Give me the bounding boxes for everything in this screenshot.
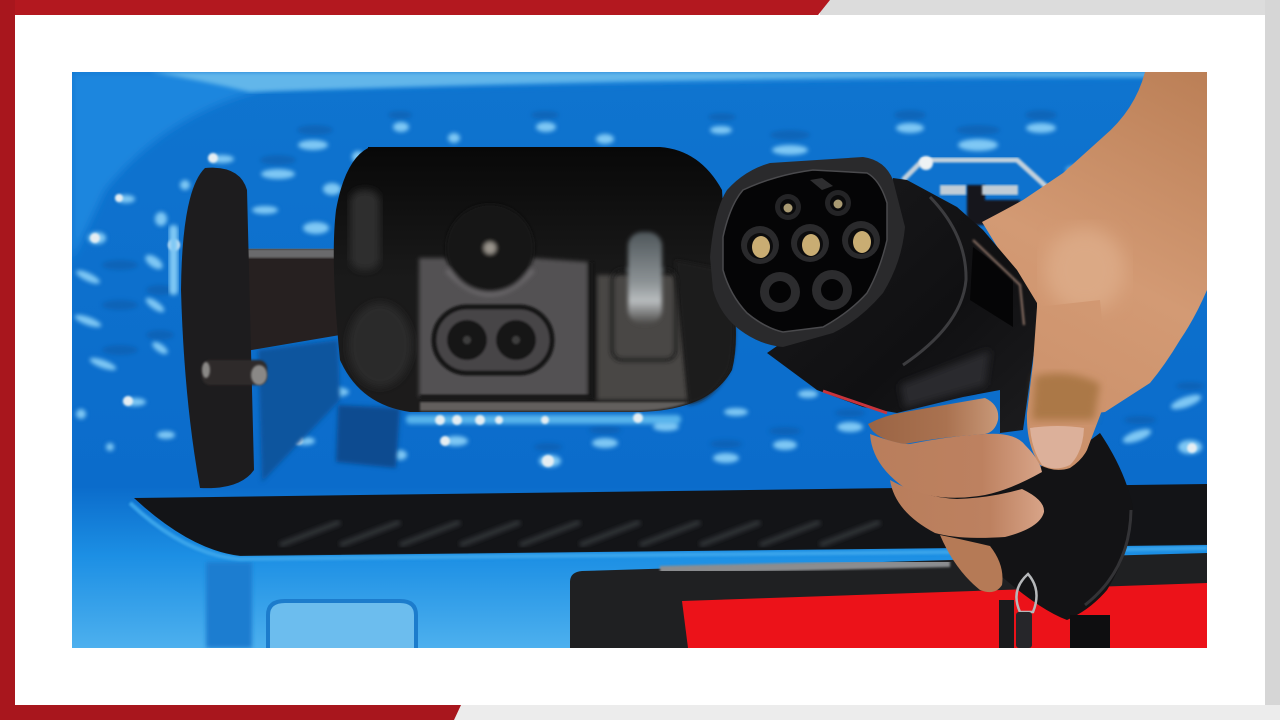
handle cuff edge	[1085, 510, 1131, 605]
emblem behind connector	[903, 160, 1050, 190]
emblem light bars	[940, 185, 1018, 195]
flap hinge arm	[248, 249, 338, 350]
hand	[982, 72, 1207, 420]
DC right hole	[496, 320, 536, 360]
upper socket well	[446, 238, 535, 294]
emblem dark bars	[967, 185, 1020, 225]
upper socket	[446, 238, 535, 297]
panel upper left bevel	[72, 72, 248, 252]
frame: light bottom bar	[450, 705, 1280, 720]
photo: EV charging port and connector	[72, 72, 1207, 648]
pin PP	[812, 270, 852, 310]
frame: red bottom bar	[0, 705, 461, 720]
strap cord	[999, 600, 1014, 648]
face inner recess	[723, 170, 887, 332]
connector red stripe	[823, 391, 887, 413]
grey socket block	[419, 258, 588, 397]
DC left hole	[447, 320, 487, 360]
grille slot light edge	[130, 503, 1207, 559]
barrel collar line	[903, 197, 966, 365]
emblem highlight dot	[919, 156, 933, 170]
right grey block	[597, 275, 690, 400]
panel top light edge	[72, 72, 1150, 92]
latch frame	[612, 270, 676, 360]
grille hatching	[280, 522, 880, 545]
pin L2	[825, 190, 851, 216]
flap hinge top edge	[245, 249, 337, 258]
latch highlight	[628, 232, 662, 324]
strap fob	[1016, 612, 1032, 648]
tail light trim	[660, 563, 950, 570]
latch	[612, 232, 676, 360]
frame: grey right bar	[1265, 0, 1280, 720]
pin CP	[760, 272, 800, 312]
little finger	[940, 535, 1002, 592]
door shadow on panel	[258, 340, 340, 482]
connector barrel	[767, 178, 1037, 433]
tail light red lens	[682, 583, 1207, 648]
connector grip panel	[970, 247, 1013, 327]
panel shadow strip	[206, 562, 252, 648]
DC left hole centre	[463, 336, 471, 344]
upper socket arc	[447, 270, 533, 294]
grille slot	[134, 484, 1207, 556]
block divider	[420, 262, 592, 397]
flap plate	[181, 168, 254, 488]
barrel skin reflection	[973, 240, 1024, 325]
face outer rim	[710, 157, 905, 347]
upper socket pin	[484, 242, 496, 254]
frame: red top bar	[0, 0, 830, 15]
charge port recess	[334, 147, 736, 412]
thumbnail	[1030, 426, 1084, 468]
connector cable	[1070, 615, 1110, 648]
recess shadow block	[336, 405, 400, 468]
palm and wrist	[982, 72, 1207, 420]
frame: red left bar	[0, 0, 15, 720]
DC socket frame	[434, 307, 552, 373]
flap hinge bolt	[202, 360, 267, 385]
palm highlight	[1045, 228, 1125, 312]
middle finger	[870, 434, 1042, 498]
connector handle lower	[990, 433, 1133, 620]
panel streak by flap	[169, 225, 178, 295]
fingers and thumb	[868, 300, 1107, 592]
perforation bright cores	[90, 153, 1197, 467]
right dark side	[678, 302, 738, 407]
lower grey strip	[420, 402, 690, 411]
pin PE	[791, 224, 829, 262]
thumb knuckle tan patch	[1032, 373, 1100, 420]
recess left upper lump	[350, 190, 380, 270]
charge flap	[181, 168, 340, 488]
pin N	[741, 226, 779, 264]
perforation shadows	[102, 110, 1204, 451]
connector face	[710, 157, 905, 347]
tail light housing	[570, 553, 1207, 648]
car body panel	[72, 72, 1207, 648]
key notch	[810, 178, 833, 190]
index finger	[868, 398, 998, 444]
thumb	[1027, 300, 1107, 470]
lower DC socket	[434, 307, 552, 373]
pin L3	[842, 221, 880, 259]
pin L1	[775, 194, 801, 220]
barrel gloss	[900, 350, 990, 408]
perforation highlights	[73, 122, 1203, 467]
lower recess outline	[268, 601, 416, 648]
flap bolt highlights	[202, 362, 267, 385]
DC right hole centre	[512, 336, 520, 344]
recess left lump	[348, 303, 412, 387]
frame: grey top bar	[820, 0, 1280, 15]
ring finger	[890, 480, 1044, 538]
strap loop	[1016, 574, 1037, 612]
